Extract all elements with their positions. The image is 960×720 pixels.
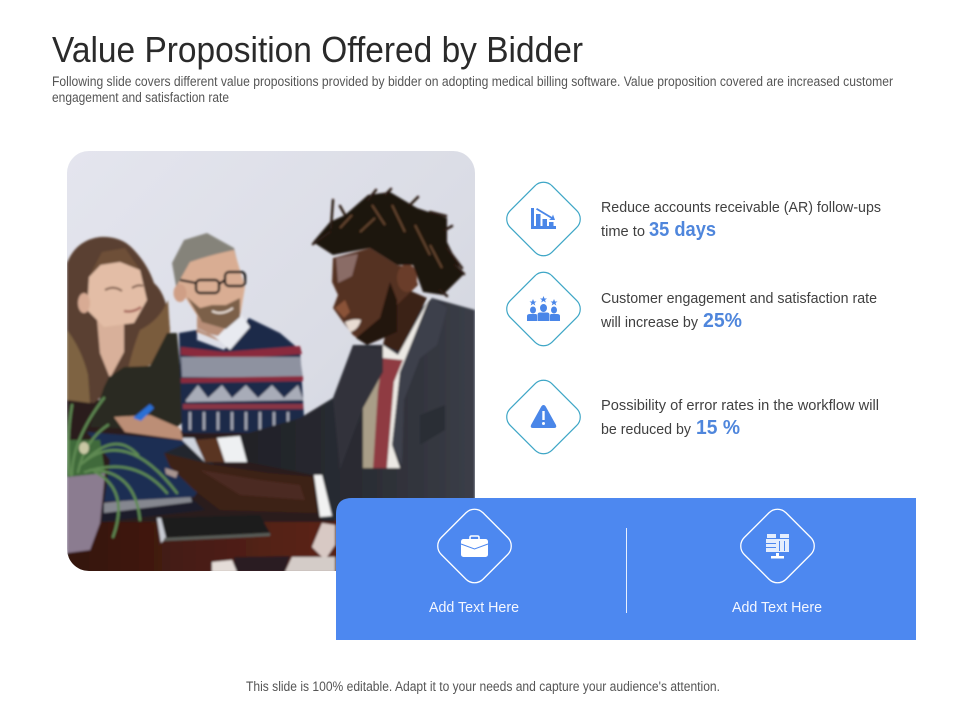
laptop and tablet [87,432,214,522]
dark base behind hands [67,400,335,522]
value item 3 text: be reduced by [601,421,691,438]
blue panel [336,498,916,640]
phone [157,515,270,543]
hands and cuffs [114,404,332,517]
man in suit [234,189,475,520]
table [67,518,336,571]
value item 3 text: 15 % [696,417,740,439]
value item 1 text: time to [601,223,645,240]
panel label 2: Add Text Here [732,599,822,616]
value item 2 text: will increase by [600,314,698,331]
value item 1 text [601,199,881,241]
table reflection [212,523,335,572]
photo: three colleagues reviewing a tablet [67,151,475,575]
footer note: This slide is 100% editable. Adapt it to your needs and capture your audience's attention. [246,679,720,694]
panel label 1: Add Text Here [429,599,519,616]
panel icon: briefcase [433,504,516,588]
subtitle text block [52,74,893,105]
value item 2 icon: team with stars [502,267,585,351]
bearded man with glasses [172,233,304,433]
divider [626,528,627,613]
value item 3 text [601,397,879,439]
subtitle text block: engagement and satisfaction rate [52,90,229,105]
value item 3 text: Possibility of error rates in the workflow will [601,397,879,414]
value item 2 text: 25% [703,310,742,332]
value item 1 text: Reduce accounts receivable (AR) follow-ups [601,199,881,216]
value item 1 icon: declining bar chart [502,177,585,261]
title: Value Proposition Offered by Bidder [52,29,583,70]
value item 2 text: Customer engagement and satisfaction rate [601,290,877,307]
woman [67,237,185,430]
plant and pot [67,398,177,553]
value item 2 text [600,290,877,332]
value item 3 icon: warning triangle [502,375,585,459]
panel icon: monitor dashboard [736,504,819,588]
value item 1 text: 35 days [649,219,716,241]
